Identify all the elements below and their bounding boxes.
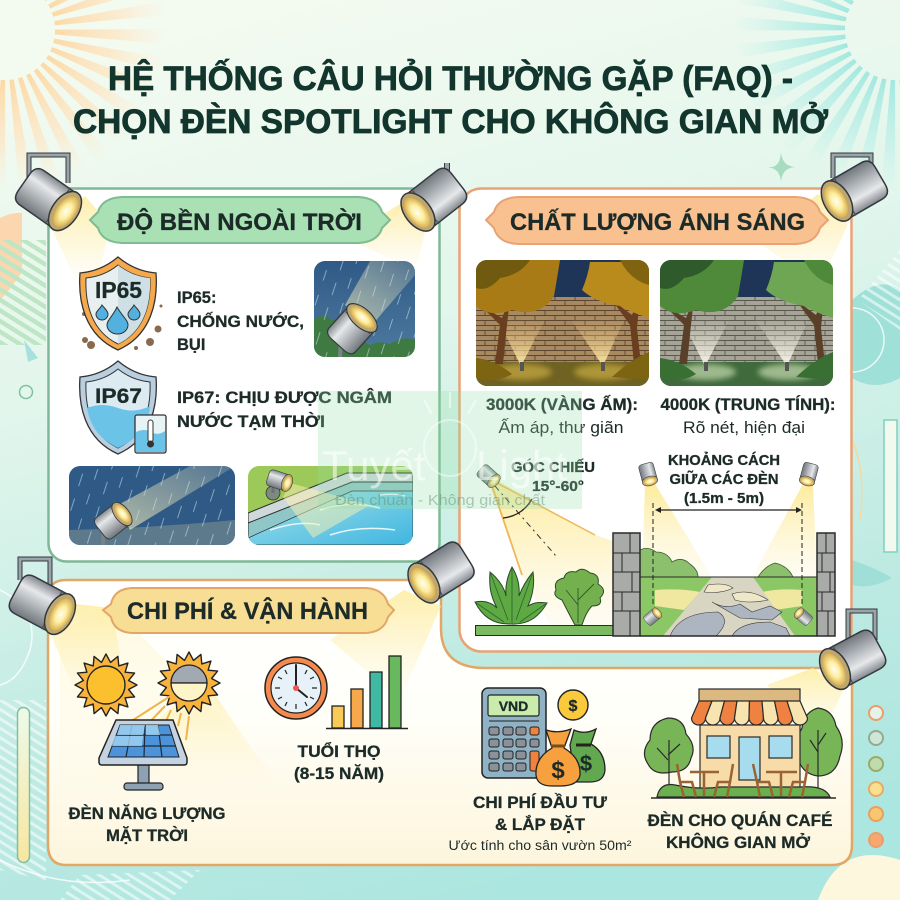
icon: money bags: $: [580, 751, 592, 776]
panel: chất lượng ánh sáng: [460, 188, 852, 652]
text: chi phí đầu tư: [448, 793, 632, 853]
illustration: garden path with pillars: GIỮA CÁC ĐÈN: [670, 470, 778, 488]
sun rays top right: [790, 0, 900, 135]
heading: độ bền: [90, 197, 390, 243]
icon: calculator: VND: [499, 698, 528, 714]
photo: 4000K neutral: [660, 260, 833, 386]
sun rays top left: [0, 0, 110, 135]
watermark: Đèn chuẩn - Không gian chất: [335, 492, 546, 509]
text: đèn năng lượng mặt trời: [68, 804, 226, 845]
watermark: Tuyết: [322, 442, 426, 489]
icon: IP67 shield: IP67: [95, 385, 142, 408]
icon: IP65 shield: [80, 257, 162, 350]
text: tuổi thọ: [294, 742, 384, 783]
title: [73, 59, 828, 141]
text: 4000K: 4000K (TRUNG TÍNH):: [660, 395, 836, 414]
text: quán café: ĐÈN CHO QUÁN CAFÉ: [648, 811, 832, 830]
title: HỆ THỐNG CÂU HỎI THƯỜNG GẶP (FAQ) -: [108, 59, 793, 98]
illustration: garden path with pillars: [613, 452, 835, 636]
text: quán café: [648, 811, 832, 852]
watermark: [318, 391, 582, 509]
icon: money bags: [536, 729, 605, 786]
icon: sun: [75, 654, 137, 716]
photo: rain beam: [69, 466, 235, 545]
diagram: beam angle: 15°-60°: [532, 479, 584, 495]
panel: độ bền ngoài trời: [48, 188, 440, 562]
text: tuổi thọ: (8-15 NĂM): [294, 764, 384, 783]
icon: money bags: $: [551, 757, 565, 784]
diagram: beam angle: [475, 458, 613, 625]
spotlight: bottom right: [813, 611, 889, 695]
text: đèn năng lượng mặt trời: ĐÈN NĂNG LƯỢNG: [68, 804, 226, 823]
text: IP67: NƯỚC TẠM THỜI: [177, 412, 325, 431]
icon: calculator: [482, 688, 546, 778]
illustration: garden path with pillars: KHOẢNG CÁCH: [668, 452, 780, 469]
text: 3000K: [486, 395, 638, 437]
text: IP65: IP65:: [177, 289, 216, 307]
text: IP67: IP67: CHỊU ĐƯỢC NGÂM: [177, 388, 392, 407]
icon: sun with lamp: [158, 652, 220, 714]
photo: pool: [248, 466, 413, 545]
text: 3000K: Ấm áp, thư giãn: [498, 418, 624, 437]
spotlight: panel 3 top: [401, 538, 478, 609]
heading: chi phí: [103, 588, 394, 633]
heading: chi phí: CHI PHÍ & VẬN HÀNH: [127, 597, 368, 625]
watermark: Light: [476, 442, 567, 489]
icon: clock: [265, 657, 327, 719]
decorative shapes left: [0, 213, 22, 300]
icon: solar panel: [99, 695, 189, 790]
text: đèn năng lượng mặt trời: MẶT TRỜI: [106, 826, 188, 845]
spotlight: panel 2 top right: [815, 155, 891, 227]
photo: spotlight in rain: [314, 261, 415, 357]
diagram: beam angle: GÓC CHIẾU: [511, 458, 595, 476]
text: 3000K: 3000K (VÀNG ẤM):: [486, 395, 638, 414]
text: IP65: CHỐNG NƯỚC,: [177, 311, 304, 331]
heading: chất lượng: [486, 197, 828, 244]
panel: chi phí & vận hành: [48, 580, 852, 865]
illustration: garden path with pillars: (1.5m - 5m): [684, 491, 764, 507]
text: IP65: BỤI: [177, 336, 205, 354]
text: 4000K: [660, 395, 836, 437]
text: chi phí đầu tư: CHI PHÍ ĐẦU TƯ: [473, 793, 607, 812]
text: quán café: KHÔNG GIAN MỞ: [666, 833, 810, 852]
text: IP65: [177, 289, 304, 354]
icon: café: [644, 689, 842, 798]
title: CHỌN ĐÈN SPOTLIGHT CHO KHÔNG GIAN MỞ: [73, 102, 828, 141]
icon: IP65 shield: IP65: [95, 277, 142, 303]
heading: độ bền: ĐỘ BỀN NGOÀI TRỜI: [117, 208, 362, 236]
text: IP67: [177, 388, 392, 431]
icon: IP67 shield: [80, 361, 166, 454]
decorative shapes right: [852, 284, 900, 385]
bar chart: tuổi thọ: [326, 656, 408, 728]
text: tuổi thọ: TUỔI THỌ: [298, 742, 381, 761]
heading: chất lượng: CHẤT LƯỢNG ÁNH SÁNG: [510, 208, 805, 236]
text: chi phí đầu tư: & LẮP ĐẶT: [495, 815, 585, 834]
illustration: plants: [475, 567, 614, 636]
spotlight: panel 1 right: [394, 163, 471, 237]
icon: coin: [558, 690, 588, 720]
photo: 3000K warm: [476, 260, 649, 386]
text: 4000K: Rõ nét, hiện đại: [683, 419, 805, 437]
spotlight: top left: [11, 155, 88, 236]
decorative dots: [869, 706, 883, 847]
decorative bars: [18, 420, 897, 862]
text: chi phí đầu tư: Ước tính cho sân vườn 50m²: [448, 838, 632, 853]
spotlight: panel 3 top left: [6, 559, 82, 640]
icon: coin: $: [569, 698, 578, 715]
